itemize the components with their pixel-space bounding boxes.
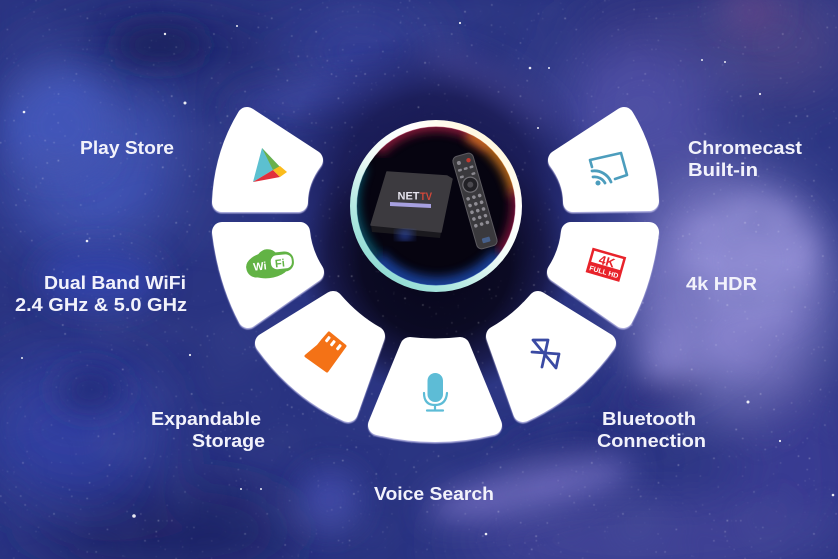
remote control [452,152,498,250]
label: bluetooth connection [597,408,706,451]
panel: 4k hdr tile [557,232,649,318]
label: dual band wifi: Dual Band WiFi [44,272,186,293]
label: 4k hdr: 4k HDR [686,273,757,294]
label: voice search: Voice Search [374,483,494,504]
tv box: NET [398,190,420,202]
icon: 4k full hd badge: FULL HD [588,265,619,280]
label: play store: Play Store [80,137,174,158]
ring [354,124,518,288]
panel: bluetooth tile [496,301,606,412]
panel: play store tile [222,117,313,202]
label: dual band wifi: 2.4 GHz & 5.0 GHz [15,294,187,315]
panel: central product circle [353,124,518,288]
panel: chromecast tile [558,117,649,202]
label: chromecast built-in [688,137,802,180]
icon: wifi cloud: Wi [253,260,267,274]
panel: voice search tile [378,347,492,432]
icon: chromecast [590,153,627,185]
label: chromecast built-in: Built-in [688,159,758,180]
label: bluetooth connection: Connection [597,430,706,451]
label: expandable storage [151,408,265,451]
icon: wifi cloud [245,247,295,280]
panel: wifi tile [222,232,314,318]
label: chromecast built-in: Chromecast [688,137,802,158]
label: dual band wifi [15,272,187,315]
icon: microphone [424,373,447,410]
icon: 4k full hd badge [586,248,626,282]
icon: wifi cloud: Fi [274,257,285,270]
tv box [371,172,452,239]
icon: 4k full hd badge: 4K [597,253,616,271]
icon: play store triangle [253,148,287,182]
icon: bluetooth [532,340,559,368]
label: bluetooth connection: Bluetooth [602,408,696,429]
label: expandable storage: Storage [192,430,265,451]
tv box: TV [420,191,433,203]
label: expandable storage: Expandable [151,408,261,429]
inner glow [353,124,517,286]
panel: expandable storage tile [265,301,375,412]
icon: memory card [306,333,345,371]
